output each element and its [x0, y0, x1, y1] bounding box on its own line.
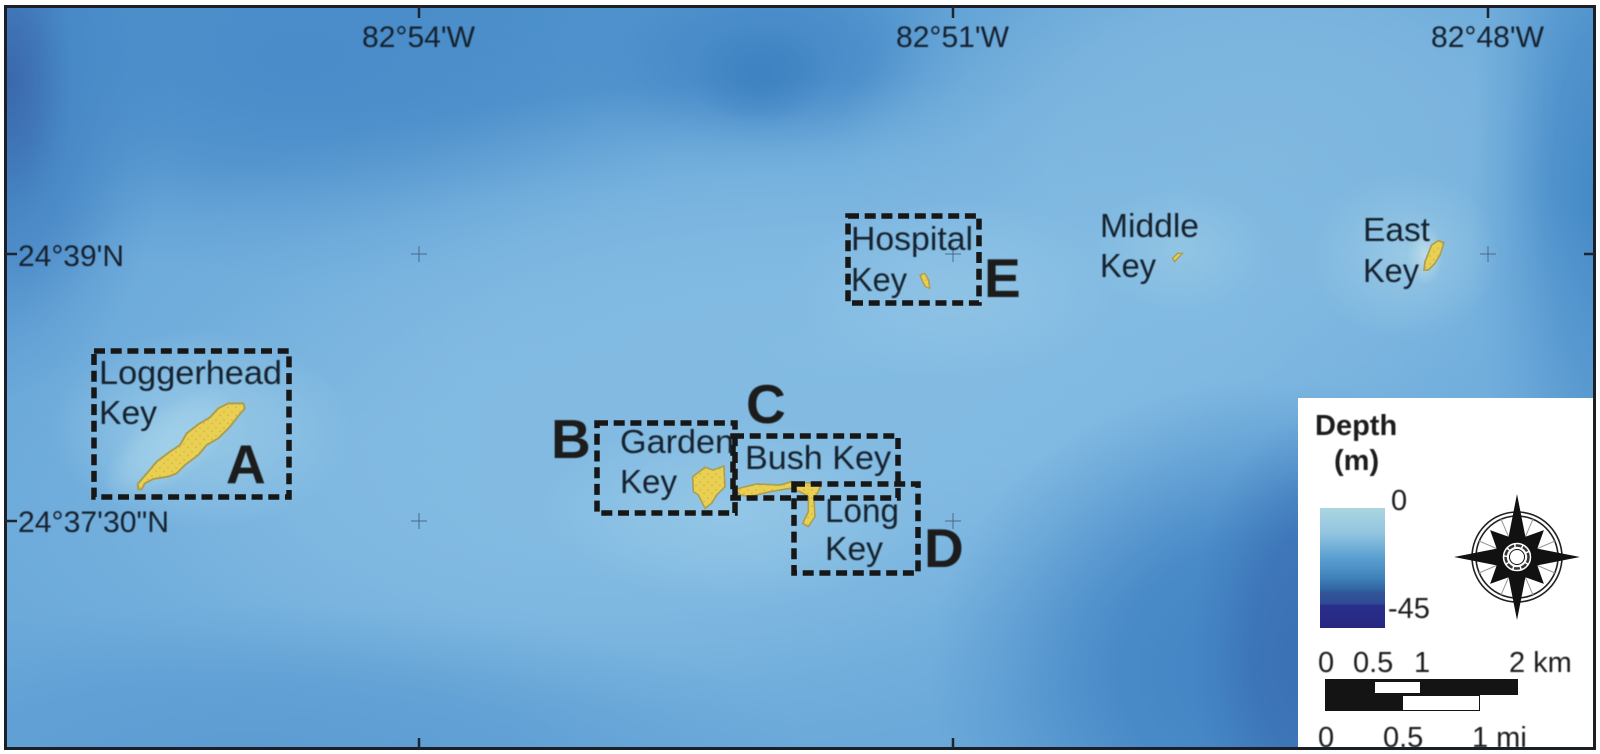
scale bar labels kilometres: 0.5 [1353, 647, 1393, 679]
scale bar [1325, 679, 1518, 711]
compass rose [1454, 494, 1580, 620]
scale bar labels miles: 0 [1318, 722, 1334, 754]
scale bar labels miles: 0.5 [1383, 722, 1423, 754]
legend frame edges [1298, 398, 1595, 749]
site box E [848, 216, 979, 303]
island name labels: Garden [620, 423, 734, 460]
depth bar labels: -45 [1388, 593, 1430, 625]
scale bar labels kilometres: 1 [1414, 647, 1430, 679]
site box C [733, 436, 898, 498]
islands: Hospital and Middle Keys [920, 253, 1182, 288]
island name labels: Key [620, 463, 677, 500]
panel letters: D [924, 517, 964, 579]
island: East Key [1424, 241, 1444, 270]
coordinate labels: 82°51'W [896, 21, 1010, 54]
panel letters: E [984, 247, 1021, 309]
legend title: (m) [1334, 445, 1379, 477]
island name labels: Key [1100, 247, 1156, 284]
scale bar labels miles [1318, 722, 1527, 754]
legend title: Depth [1315, 410, 1397, 442]
depth bar labels [1388, 485, 1430, 625]
scale bar labels kilometres [1318, 647, 1572, 679]
site box B [597, 423, 735, 513]
scale bar labels kilometres: 0 [1318, 647, 1334, 679]
island name labels: Middle [1100, 207, 1199, 244]
island name labels: Key [851, 261, 907, 298]
scale bar labels kilometres: 2 km [1509, 647, 1572, 679]
panel letters: A [226, 433, 266, 495]
island name labels: Key [825, 530, 883, 567]
island name labels: Key [99, 394, 157, 431]
island name labels [99, 207, 1430, 567]
island name labels: Key [1363, 252, 1419, 289]
coordinate labels: 24°39'N [18, 240, 124, 273]
island name labels: Bush Key [745, 439, 892, 476]
panel letters: B [551, 408, 591, 470]
site box A [94, 351, 289, 497]
depth colour bar [1320, 508, 1385, 628]
panel letters: C [746, 373, 786, 435]
panel letters [226, 247, 1021, 579]
legend panel [1298, 398, 1594, 754]
scale bar labels miles: 1 mi [1472, 722, 1527, 754]
coordinate labels: 82°54'W [362, 21, 476, 54]
island: Loggerhead Key [138, 403, 245, 489]
coordinate labels [18, 21, 1545, 539]
islands: Garden, Bush and Long Keys [693, 466, 822, 527]
island name labels: Long [825, 492, 899, 529]
site box D [794, 484, 918, 573]
island name labels: Loggerhead [99, 354, 282, 391]
legend title [1315, 410, 1397, 477]
coordinate labels: 82°48'W [1431, 21, 1545, 54]
island name labels: Hospital [851, 220, 973, 257]
coordinate labels: 24°37'30"N [18, 506, 169, 539]
island name labels: East [1363, 211, 1430, 248]
depth bar labels: 0 [1391, 485, 1407, 517]
